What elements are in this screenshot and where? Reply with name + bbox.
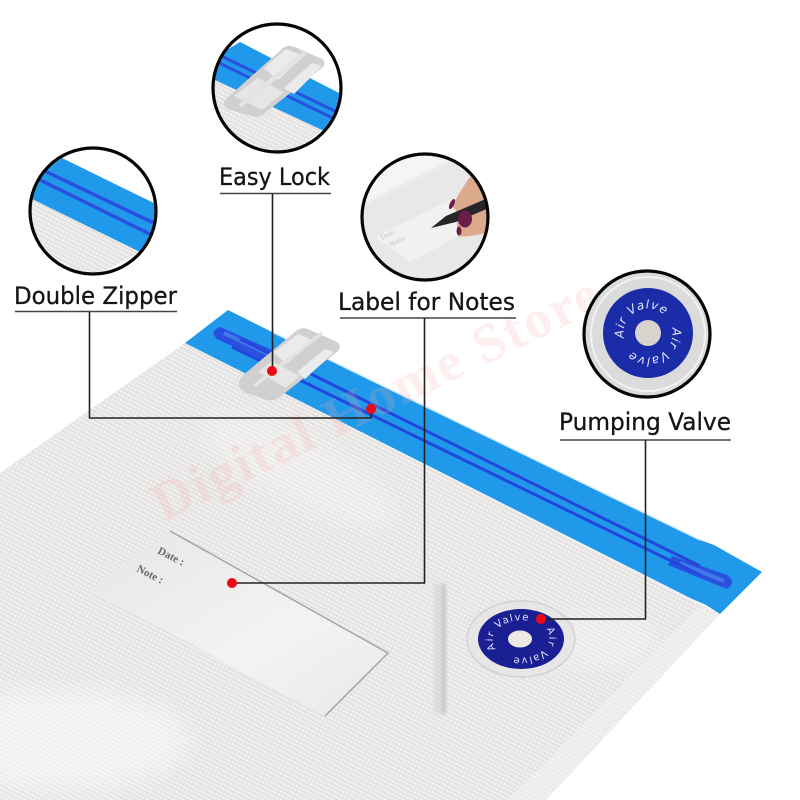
blue zipper strip [185,310,762,614]
air valve on bag [466,600,576,678]
heading: pumping valve: Pumping Valve [559,408,731,436]
air valve on bag: Air Valve [485,614,528,650]
easy lock clip on bag [239,328,340,400]
heading: label for notes: Label for Notes [338,288,515,316]
zipper slot right [668,556,732,589]
heading: double zipper: Double Zipper [14,282,177,310]
label card [90,531,388,716]
callout: pumping valve [536,408,731,624]
bag seam [434,584,446,714]
bag sealed side rim [508,606,720,800]
inset: easy lock [211,22,343,154]
hand [452,177,486,236]
inset: pumping valve [582,269,712,399]
label card: Note : [135,563,165,587]
bag body [0,343,720,800]
pen [431,198,489,228]
label card: Date : [156,545,186,569]
bag light patches [0,425,640,790]
heading: easy lock: Easy Lock [219,163,330,191]
callout: double zipper [14,282,376,418]
watermark: Digital Home Store [142,263,609,533]
inset: pumping valve: Air Valve [614,299,667,339]
inset: label for notes [360,152,490,282]
zipper lines [240,339,700,566]
fingernails [458,210,472,228]
air valve on bag: Air Valve [514,628,557,664]
inset: pumping valve: Air Valve [629,327,682,367]
vacuum bag [0,223,762,800]
inset: double zipper [28,146,158,276]
zipper slot left [214,327,272,362]
callout: easy lock [219,163,331,376]
inset: label for notes: Notes: [388,233,408,249]
inset: label for notes: Date: [379,228,396,242]
callout: label for notes [227,288,516,588]
